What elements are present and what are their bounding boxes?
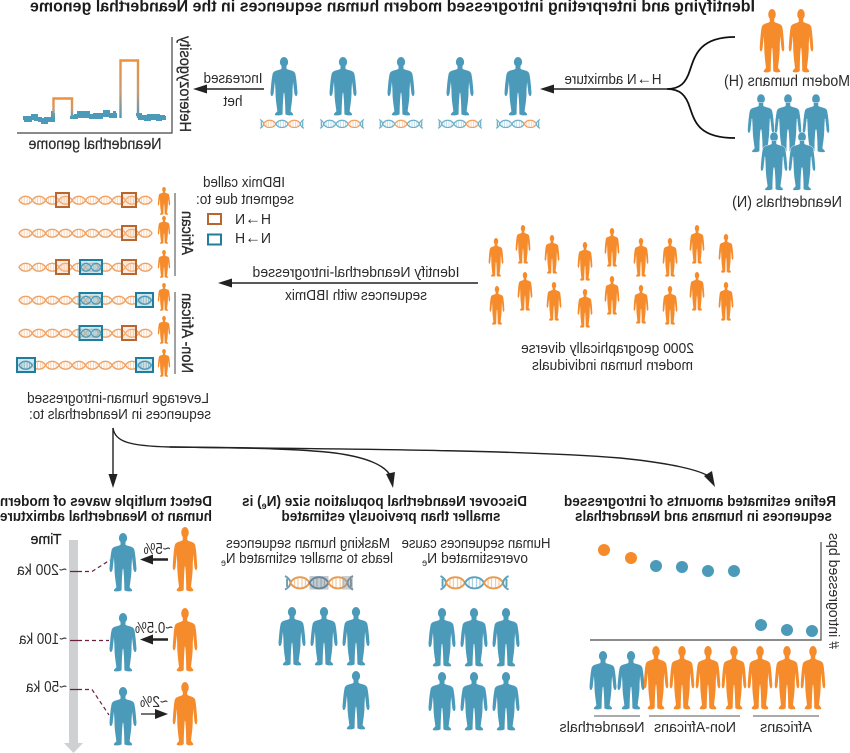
percentages: ~0.5% xyxy=(135,620,173,637)
text: leverage sequences: Leverage human-introgressed xyxy=(27,390,209,407)
heading: Discover Neanderthal population size (N xyxy=(239,493,527,510)
label: H to N admixture: H→N admixture xyxy=(564,69,662,88)
label: African: African xyxy=(178,211,195,255)
subheading: overestimated: Human sequences cause xyxy=(402,535,550,552)
legend: IBDmix segment causes: H→N xyxy=(235,209,271,228)
x axis label: Neanderthal genome xyxy=(28,136,162,153)
subheading: masking: leads to smaller estimated N xyxy=(204,550,393,567)
group labels: Neanderthals xyxy=(560,719,644,736)
subheading: masking xyxy=(221,535,393,569)
peaks xyxy=(54,98,72,118)
label: increased het: het xyxy=(223,93,242,110)
panel: 2000 modern human individuals xyxy=(489,225,733,374)
row of admixed individuals xyxy=(260,57,540,128)
chart axes xyxy=(590,542,821,640)
percentages: ~2% xyxy=(140,694,168,711)
caption: 2000 geographically diverse xyxy=(521,340,694,357)
subheading: overestimated xyxy=(402,535,550,569)
heading xyxy=(564,493,836,525)
panel: Neanderthals group xyxy=(732,94,842,211)
icon: Neanderthal figures xyxy=(748,94,829,190)
arrow: increased het xyxy=(193,84,264,94)
signal line xyxy=(23,112,164,122)
group brackets xyxy=(174,193,176,374)
group brackets xyxy=(594,715,819,717)
y axis label: # introgressed bps xyxy=(825,533,842,649)
group labels xyxy=(560,719,812,736)
heading: e xyxy=(261,501,267,512)
icon: masked DNA xyxy=(285,576,353,590)
panel: refined introgressed amounts xyxy=(560,493,842,736)
heading xyxy=(242,493,527,525)
arrows: branching to three findings xyxy=(108,428,715,488)
DNA inside blue segment boxes xyxy=(19,263,151,369)
heading xyxy=(0,493,212,525)
caption: modern human individuals xyxy=(532,357,693,374)
legend: IBDmix segment causes xyxy=(196,174,294,247)
panel: IBDmix called segments xyxy=(17,187,195,377)
DNA rows xyxy=(19,196,152,369)
icon: modern humans figures xyxy=(760,9,813,72)
panel: multiple waves of admixture xyxy=(0,493,212,753)
heading: smaller than previously estimated xyxy=(282,508,500,525)
text: leverage sequences: sequences in Neanderthals to: xyxy=(29,406,211,423)
subheading: overestimated: e xyxy=(422,558,427,569)
icon: full DNA xyxy=(440,576,508,590)
percentages xyxy=(135,541,173,711)
label: increased het xyxy=(204,70,262,110)
icons: Neanderthals xyxy=(110,533,136,745)
label: modern humans: Modern humans (H) xyxy=(724,73,850,90)
label: identify sequences xyxy=(252,264,460,304)
label: identify sequences: Identify Neanderthal-introgressed xyxy=(252,264,460,281)
data points: blue xyxy=(650,560,818,637)
time labels: ~50 ka xyxy=(26,679,67,696)
chart: heterozygosity across the Neanderthal genome xyxy=(17,36,193,153)
subheading: masking: Masking human sequences xyxy=(226,535,390,552)
caption xyxy=(521,340,694,374)
text: leverage sequences xyxy=(27,390,211,423)
label: Non-African: Non- African xyxy=(178,293,195,373)
time arrow xyxy=(64,540,83,753)
icons: Neanderthals xyxy=(590,651,644,709)
legend: IBDmix segment causes: IBDmix called xyxy=(203,174,285,191)
legend: IBDmix segment causes: segment due to: xyxy=(196,191,294,208)
heading: sequences in humans and Neanderthals xyxy=(575,508,832,525)
subheading: overestimated: overestimated N xyxy=(419,550,528,567)
group labels: Non-Africans xyxy=(654,719,736,736)
legend: IBDmix segment causes: N→H xyxy=(235,228,271,247)
label: increased het: Increased xyxy=(204,70,262,87)
time labels: ~100 ka xyxy=(19,631,67,648)
panel: modern humans group xyxy=(724,9,850,90)
y axis label: Heterozygosity xyxy=(176,36,193,132)
heading: Refine estimated amounts of introgressed xyxy=(564,493,836,510)
arrow: admixture bracket xyxy=(540,37,735,138)
label: time: Time xyxy=(30,531,62,548)
data points: orange xyxy=(598,544,637,564)
subheading: masking: e xyxy=(221,558,226,569)
label: Neanderthals: Neanderthals (N) xyxy=(732,194,842,211)
icons: small orange individuals xyxy=(158,187,170,377)
dashed connectors xyxy=(70,560,110,715)
gene flow arrows xyxy=(140,554,168,719)
percentages: ~5% xyxy=(143,541,170,558)
label: identify sequences: sequences with IBDmix xyxy=(285,287,427,304)
heading: ) is xyxy=(242,493,262,510)
icons: humans xyxy=(644,646,825,709)
icon: DNA strands xyxy=(260,120,540,128)
segment boxes: blue N to H xyxy=(17,260,153,372)
time labels xyxy=(17,562,67,696)
group labels: Africans xyxy=(760,719,812,736)
icons: orange individuals xyxy=(489,225,733,328)
panel: Neanderthal population size xyxy=(221,493,551,730)
icons: masked population xyxy=(279,607,369,729)
time labels: ~200 ka xyxy=(17,562,67,579)
arrow: identify sequences with IBDmix xyxy=(218,278,478,288)
icons: overestimated population xyxy=(429,608,519,730)
icons: modern humans xyxy=(173,527,197,745)
icon: individuals xyxy=(271,57,531,115)
axes xyxy=(17,37,172,133)
segment boxes: orange H to N xyxy=(56,193,136,340)
